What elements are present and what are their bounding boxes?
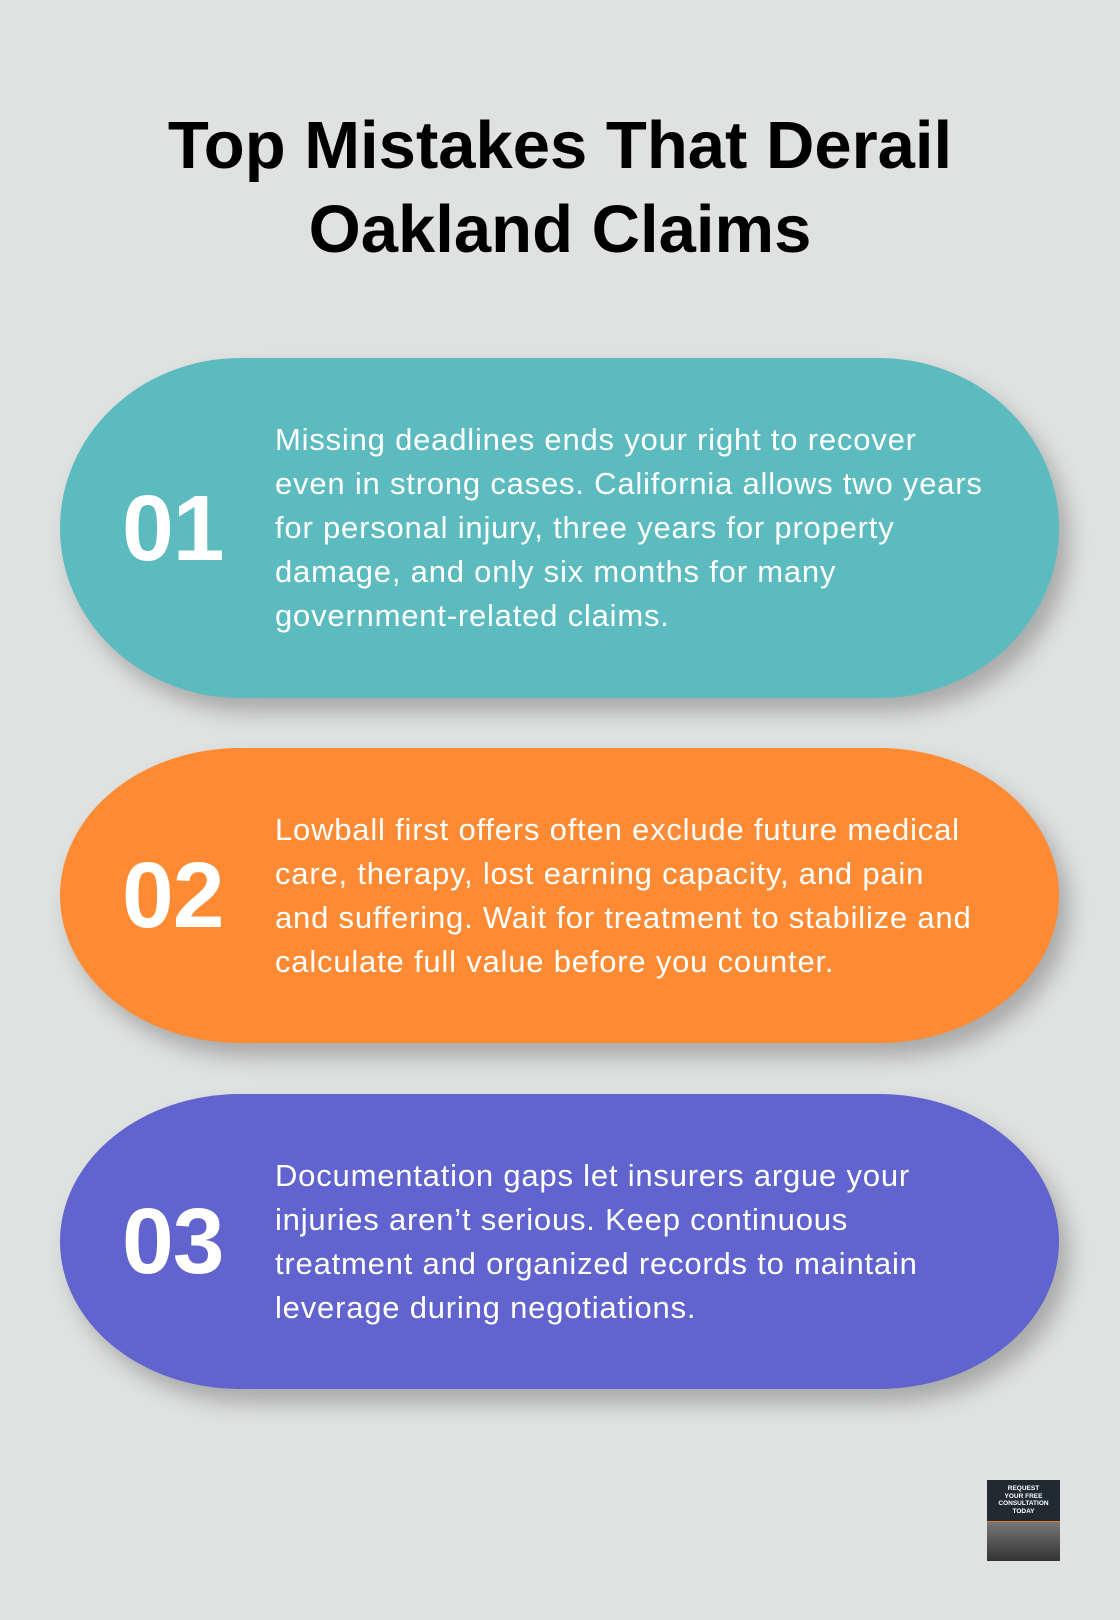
- logo: consultation badge: REQUEST: [1008, 1485, 1039, 1492]
- number 02: 02: [122, 843, 223, 947]
- text 01: [275, 422, 983, 633]
- text 03: Documentation gaps let insurers argue your: [275, 1158, 910, 1192]
- text 01: for personal injury, three years for property: [275, 510, 895, 545]
- logo: consultation badge: CONSULTATION: [998, 1500, 1049, 1507]
- text 03: [275, 1158, 918, 1324]
- text 01: government-related claims.: [275, 598, 670, 633]
- panel: mistake 01: [60, 358, 1059, 698]
- text 01: Missing deadlines ends your right to recover: [275, 422, 917, 457]
- panel: mistake 02: [60, 748, 1059, 1043]
- number 03: 03: [122, 1189, 223, 1293]
- logo: consultation badge: [987, 1480, 1060, 1558]
- title: Top Mistakes That Derail: [168, 108, 952, 183]
- text 02: Lowball first offers often exclude future medical: [275, 812, 960, 846]
- text 02: [275, 812, 972, 978]
- panel: mistake 03: [60, 1094, 1059, 1389]
- text 03: leverage during negotiations.: [275, 1290, 696, 1324]
- title: [168, 108, 952, 267]
- logo: consultation badge: YOUR FREE: [1005, 1492, 1042, 1500]
- number 01: 01: [122, 476, 223, 580]
- text 01: even in strong cases. California allows two years: [275, 466, 983, 501]
- title: Oakland Claims: [309, 192, 811, 267]
- text 03: injuries aren’t serious. Keep continuous: [275, 1202, 848, 1236]
- text 02: care, therapy, lost earning capacity, and pain: [275, 856, 924, 890]
- logo: consultation badge: TODAY: [1012, 1508, 1035, 1514]
- text 02: and suffering. Wait for treatment to stabilize and: [275, 900, 972, 934]
- text 03: treatment and organized records to maintain: [275, 1246, 918, 1280]
- text 02: calculate full value before you counter.: [275, 944, 834, 978]
- text 01: damage, and only six months for many: [275, 554, 836, 589]
